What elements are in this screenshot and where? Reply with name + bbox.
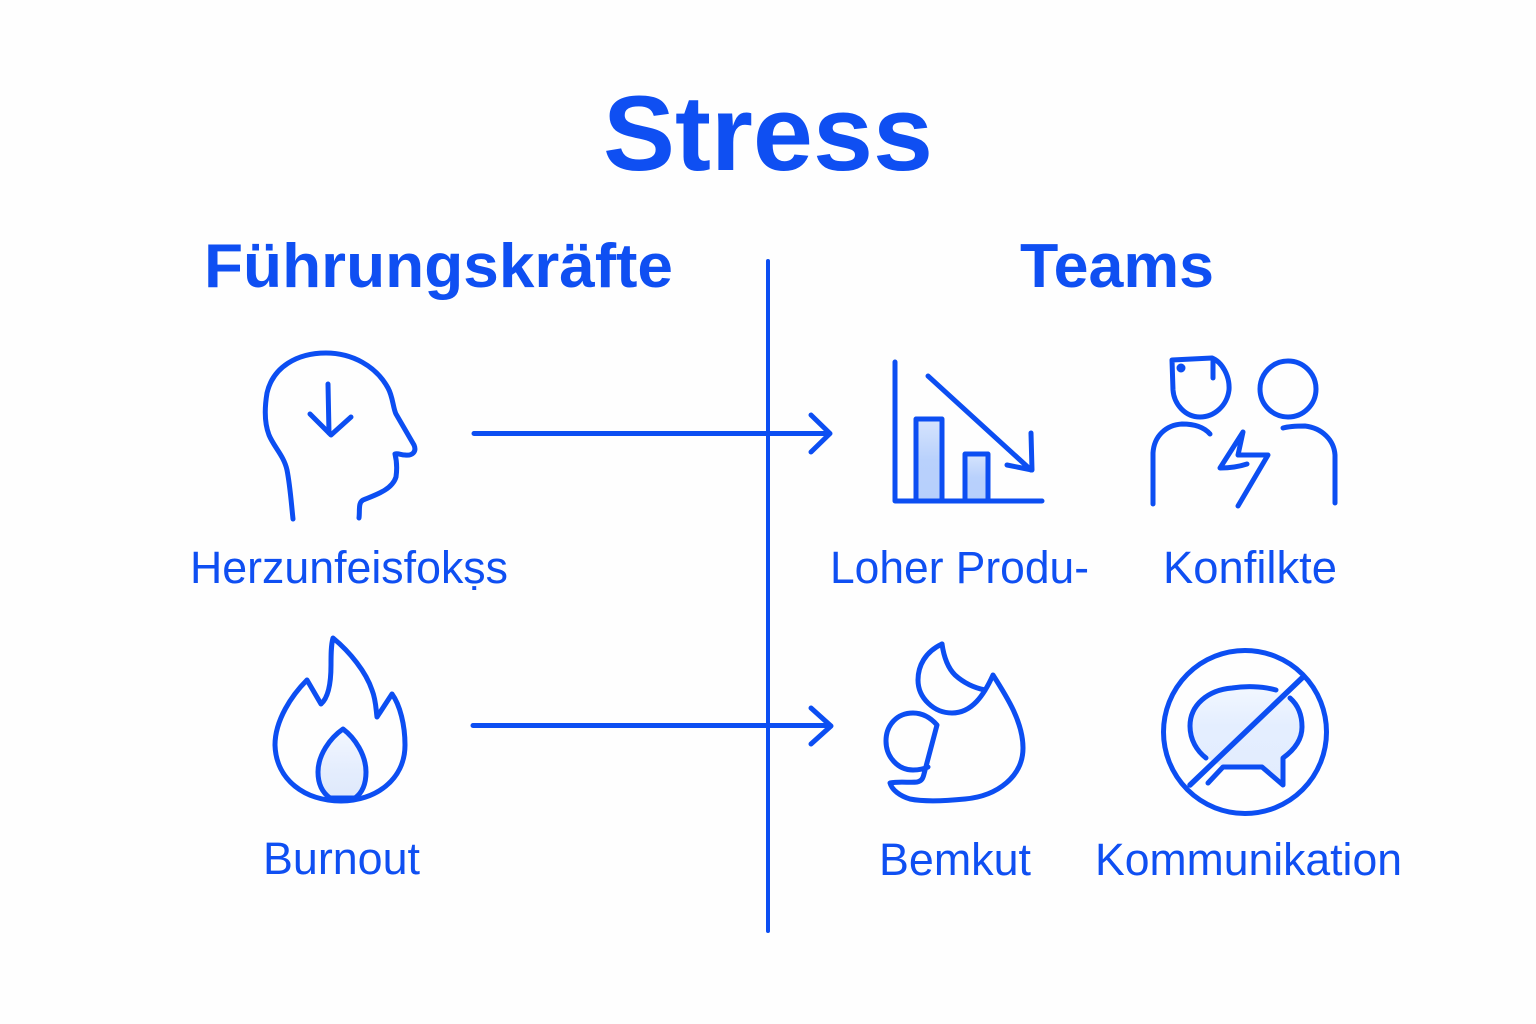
label: Loher Produ-: Loher Produ- <box>830 542 1089 593</box>
arrow: bottom <box>473 708 831 744</box>
central divider <box>766 261 770 931</box>
label: Konfilkte: Konfilkte <box>1163 542 1337 593</box>
title: Stress <box>603 73 933 193</box>
icon: two people in conflict <box>1153 358 1335 506</box>
label: Bemkut: Bemkut <box>879 834 1031 885</box>
icon: Bemkut shape <box>886 644 1023 801</box>
label: Kommunikation: Kommunikation <box>1095 834 1402 885</box>
arrow: top <box>474 415 830 452</box>
heading: Führungskräfte: Führungskräfte <box>204 232 673 301</box>
icon: flame <box>275 638 405 801</box>
icon: head with down arrow <box>265 353 415 519</box>
label: Burnout: Burnout <box>263 833 420 884</box>
heading: Teams: Teams <box>1020 232 1214 301</box>
label: Herzunfeisfokṣs: Herzunfeisfokṣs <box>190 542 508 593</box>
icon: falling bar chart <box>895 362 1042 501</box>
icon: no communication <box>1164 650 1326 814</box>
